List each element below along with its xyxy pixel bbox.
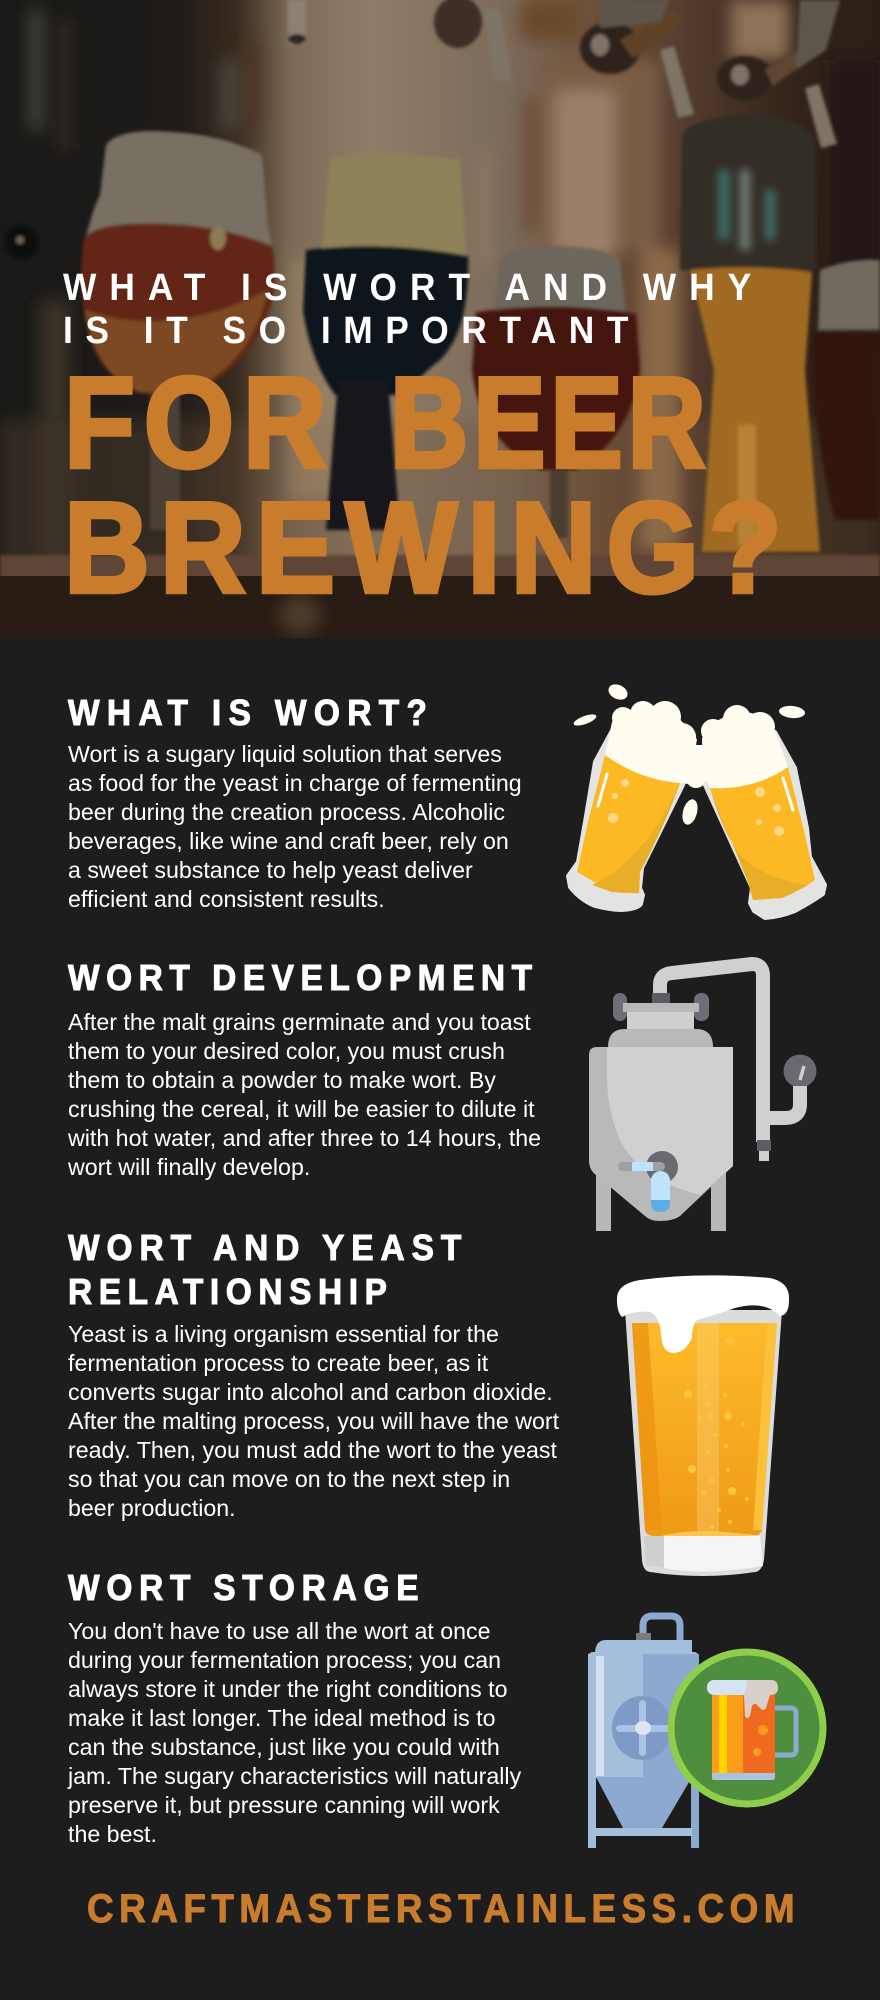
text block: fermentation process to create beer, as it [68,1350,489,1376]
icon: brewing tank [589,964,816,1231]
title emphasis [64,351,782,620]
text block: make it last longer. The ideal method is to [68,1705,496,1731]
text block: them to your desired color, you must crush [68,1038,505,1064]
text block: After the malting process, you will have the wort [68,1408,560,1434]
text block: preserve it, but pressure canning will work [68,1792,500,1818]
text block: Wort is a sugary liquid solution that serves [68,741,502,767]
title emphasis: BEER [390,351,706,495]
text block [68,1321,560,1521]
text block [67,1009,541,1180]
panel: wort and yeast relationship [68,1229,560,1521]
title lead-in: IS IT SO IMPORTANT [63,309,629,351]
bar counter [0,555,880,579]
text block: beer production. [68,1495,236,1521]
text block: wort will finally develop. [67,1154,310,1180]
text block: with hot water, and after three to 14 hours, the [67,1125,541,1151]
text block [67,1618,522,1847]
text block: ready. Then, you must add the wort to the yeast [68,1437,557,1463]
heading: WORT AND YEAST [68,1229,461,1268]
glass 5 [818,260,880,330]
title lead-in [63,266,751,351]
tap handles [288,0,306,44]
icon: pint of beer [617,1275,789,1576]
glass 1 [84,131,272,246]
icon: clinking beer glasses [568,681,825,918]
text block: crushing the cereal, it will be easier to dilute it [68,1096,535,1122]
text block: the best. [68,1821,157,1847]
title emphasis: FOR [64,351,327,495]
heading: WORT DEVELOPMENT [68,959,532,998]
text block: so that you can move on to the next step in [68,1466,510,1492]
text block: Yeast is a living organism essential for the [68,1321,499,1347]
text block: beverages, like wine and craft beer, rely on [68,828,509,854]
text block: jam. The sugary characteristics will naturally [67,1763,522,1789]
text block: as food for the yeast in charge of fermenting [68,770,522,796]
text block: them to obtain a powder to make wort. By [68,1067,496,1093]
text block: beer during the creation process. Alcoholic [68,799,505,825]
title emphasis: BREWING? [64,476,782,620]
text block: You don't have to use all the wort at once [68,1618,491,1644]
header photo: beer glasses under taps [0,0,880,638]
text block: converts sugar into alcohol and carbon dioxide. [68,1379,553,1405]
panel: what is wort [68,694,522,912]
icon: fermenter tank and beer mug badge [588,1616,823,1848]
heading [68,1229,461,1312]
glass 4 [680,114,816,270]
text block: always store it under the right conditions to [68,1676,508,1702]
text block: can the substance, just like you could with [68,1734,500,1760]
panel: wort development [67,959,541,1180]
glass 2 [322,154,466,255]
panel: wort storage [67,1569,522,1847]
heading: WHAT IS WORT? [68,694,427,733]
badge [671,1652,823,1804]
text block: After the malt grains germinate and you toast [68,1009,531,1035]
heading: WORT STORAGE [68,1569,419,1608]
title lead-in: WHAT IS WORT AND WHY [63,266,751,308]
text block: efficient and consistent results. [68,886,385,912]
heading: RELATIONSHIP [68,1273,387,1312]
glass 3 [494,246,626,310]
text block [68,741,522,912]
text block: a sweet substance to help yeast deliver [68,857,473,883]
title [63,266,782,620]
text block: during your fermentation process; you can [68,1647,501,1673]
footer website: CRAFTMASTERSTAINLESS.COM [87,1887,794,1931]
